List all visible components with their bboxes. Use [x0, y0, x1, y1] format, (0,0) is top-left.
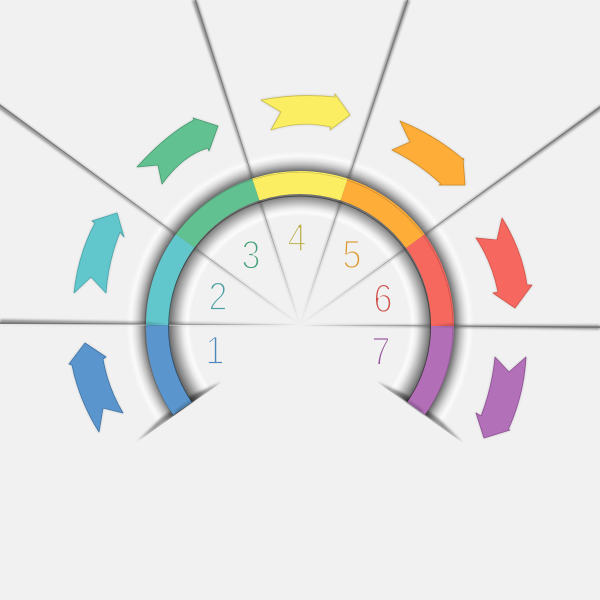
- ring segment 6: [406, 234, 454, 326]
- arrow 5: orange: [392, 121, 465, 185]
- arrow 7: purple: [476, 357, 526, 438]
- bottom cut shadows: [137, 382, 463, 600]
- radial divider lines: [0, 0, 600, 330]
- number 6: 6: [374, 275, 392, 321]
- arrow 3: green: [137, 118, 218, 184]
- arrow 2: teal: [74, 213, 124, 293]
- ring shadow halo: [155, 180, 445, 470]
- ring segment 2: [146, 234, 194, 325]
- infographic canvas: [0, 0, 600, 442]
- white edge under left divider: [0, 324, 300, 326]
- number labels: [206, 214, 392, 374]
- number 7: 7: [372, 328, 390, 374]
- number 4: 4: [288, 214, 306, 260]
- ring segment 5: [341, 179, 425, 248]
- number 2: 2: [209, 273, 227, 319]
- ring segment 4: [252, 171, 348, 200]
- number 5: 5: [343, 231, 361, 277]
- ring inner edge: [169, 196, 431, 402]
- ring outer edge: [145, 172, 453, 415]
- arrow 6: red: [476, 218, 532, 308]
- arrow 1: blue: [69, 343, 123, 432]
- arrows: [69, 94, 532, 438]
- arrow 4: yellow: [261, 94, 350, 130]
- ring segment 7: [407, 326, 454, 415]
- ring segment 3: [176, 179, 259, 248]
- number 1: 1: [206, 327, 224, 373]
- ring cut shading: [146, 322, 454, 415]
- semicircular ring: [145, 171, 454, 415]
- number 3: 3: [242, 232, 260, 277]
- ring segment 1: [146, 325, 192, 415]
